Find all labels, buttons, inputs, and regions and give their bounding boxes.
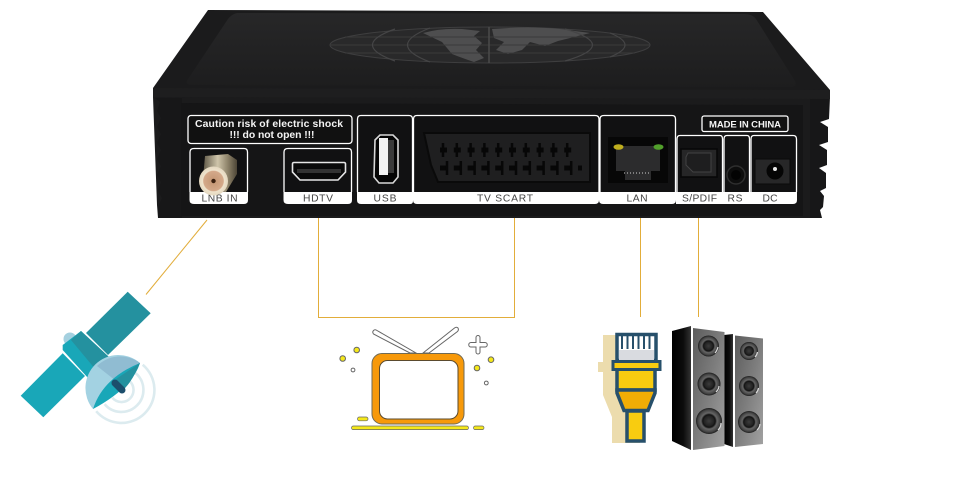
- feed horn: [115, 383, 122, 390]
- rear bump: [64, 332, 76, 346]
- yellow body: [617, 369, 655, 390]
- signal rings: [96, 365, 154, 423]
- lid: [187, 13, 796, 87]
- antennas: [373, 330, 416, 353]
- box body: [153, 10, 830, 218]
- TV SCART port: [413, 116, 599, 205]
- S/PDIF port: S/PDIF: [682, 194, 717, 205]
- icon: speakers: [672, 326, 763, 450]
- LNB IN port: [190, 148, 248, 205]
- RS port: RS: [728, 194, 743, 205]
- TV SCART port: TV SCART: [477, 194, 534, 205]
- LAN port: [599, 116, 676, 205]
- ground lines: [352, 426, 468, 430]
- icon: television: [340, 327, 494, 430]
- sparkle plus: [469, 336, 487, 354]
- icon: satellite: [21, 292, 154, 423]
- USB port: [357, 116, 413, 205]
- RS port: [723, 136, 750, 205]
- LAN port: LAN: [626, 194, 648, 205]
- caution label: [188, 116, 352, 144]
- DC port: [750, 136, 797, 205]
- made in china label: MADE IN CHINA: [709, 119, 781, 130]
- dish: [85, 355, 140, 409]
- left cooling fins: [155, 98, 182, 218]
- connector lines: [146, 218, 698, 318]
- HDTV port: HDTV: [303, 194, 333, 205]
- caution label: !!! do not open !!!: [230, 130, 314, 141]
- HDTV port: [284, 148, 352, 205]
- decorative dots: [340, 347, 494, 385]
- solar panel lower: [21, 353, 85, 417]
- solar panel upper: [86, 292, 151, 355]
- shadow: [598, 335, 640, 443]
- LNB IN port: LNB IN: [202, 194, 238, 205]
- S/PDIF port: [676, 136, 723, 205]
- USB port: USB: [374, 194, 397, 205]
- large speaker: [672, 326, 724, 450]
- receiver box: [153, 10, 830, 218]
- front face: [181, 103, 803, 216]
- caution label: Caution risk of electric shock: [195, 119, 343, 130]
- icon: ethernet plug: [598, 334, 660, 443]
- made in china label: [702, 116, 788, 132]
- clip head: [617, 334, 656, 360]
- small speaker: [724, 334, 763, 447]
- collar: [613, 362, 660, 370]
- body: [63, 331, 109, 378]
- tv frame: [372, 354, 464, 424]
- DC port: DC: [762, 194, 778, 205]
- globe logo: [330, 27, 650, 63]
- right cooling fins: [810, 97, 830, 218]
